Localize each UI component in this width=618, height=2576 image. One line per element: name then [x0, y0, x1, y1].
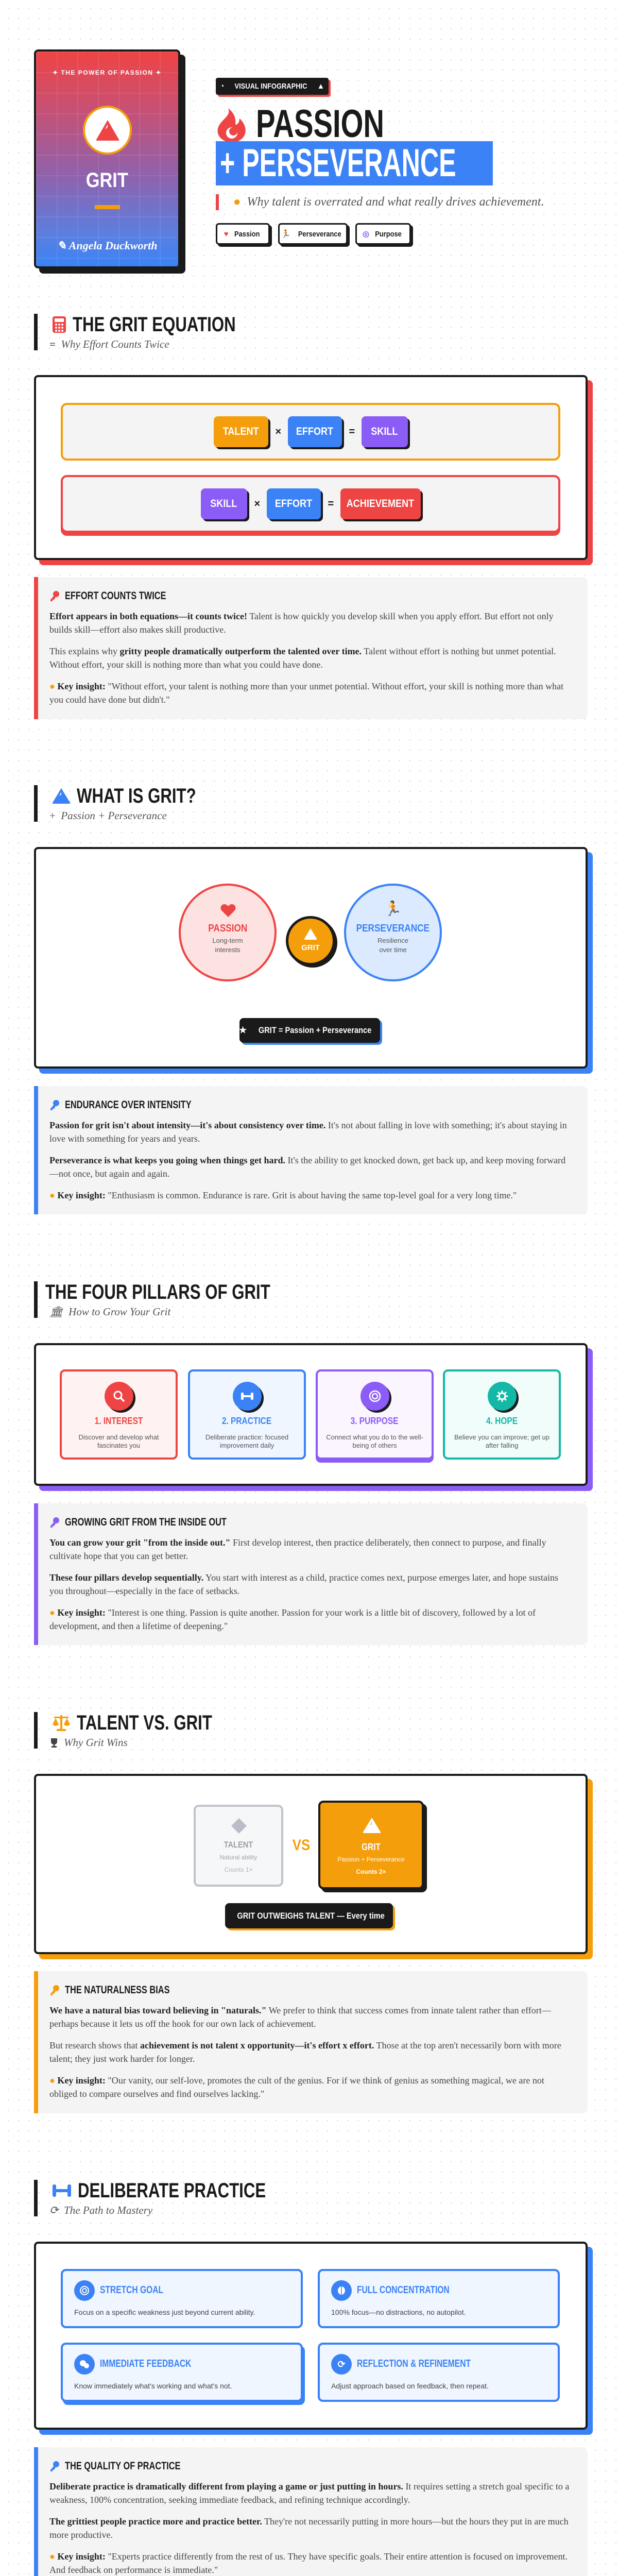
- text block: the naturalness bias: ● Key insight: "Our vanity, our self-love, promotes the cult of the genius. For if we think of genius as something magical, we are not obliged to compare ourselves and find ourselves lacking.": [49, 2075, 544, 2099]
- text block: the quality of practice: ● Key insight: "Experts practice differently from the rest of us. They have specific goals. Their entire attention is focused on improvement. And feedback on performance is immediate.": [49, 2551, 568, 2575]
- section header: talent vs grit: Why Grit Wins: [64, 1736, 128, 1749]
- text block: effort counts twice: Effort appears in both equations—it counts twice! Talent is how quickly you develop skill when you apply effort. But effort not only builds skill—effort also makes skill productive.: [49, 611, 554, 635]
- verdict pill: [225, 1903, 393, 1928]
- pillar: interest: Discover and develop what fascinates you: [78, 1433, 159, 1449]
- equation row: talent x effort = skill: TALENT: [223, 426, 259, 437]
- subtitle: ●: [233, 195, 241, 209]
- text block: endurance over intensity: Perseverance is what keeps you going when things get hard. It's the ability to get knocked down, get back up, and keep moving forward—not once, but again and again.: [49, 1155, 565, 1179]
- pillar: practice: Deliberate practice: focused improvement daily: [205, 1433, 288, 1449]
- pillar: practice: 2. PRACTICE: [222, 1416, 272, 1426]
- equation row: talent x effort = skill: =: [349, 426, 355, 437]
- formula pill: ★: [239, 1025, 247, 1035]
- circle: perseverance: Resilience: [377, 937, 408, 944]
- circle: perseverance: PERSEVERANCE: [356, 923, 430, 934]
- equation row: skill x effort = achievement: EFFORT: [275, 498, 312, 510]
- text block: endurance over intensity: Passion for grit isn't about intensity—it's about consistency over time. It's not about falling in love with something; it's about staying in love with something for years and years.: [49, 1120, 567, 1144]
- pillar: purpose: Connect what you do to the well-being of others: [326, 1433, 423, 1449]
- section header: four pillars: [34, 1281, 394, 1318]
- panel: four pillars: [34, 1343, 588, 1486]
- card: talent: Natural ability: [220, 1854, 257, 1861]
- practice card: full concentration: 100% focus—no distractions, no autopilot.: [331, 2308, 466, 2316]
- tag: purpose: Purpose: [375, 230, 402, 238]
- practice card: stretch goal: Focus on a specific weakness just beyond current ability.: [74, 2308, 255, 2316]
- equation row: skill x effort = achievement: [61, 475, 560, 533]
- section header: the grit equation: Why Effort Counts Twice: [61, 338, 169, 350]
- practice card: full concentration: FULL CONCENTRATION: [357, 2284, 450, 2296]
- text block: effort counts twice: ● Key insight: "Without effort, your talent is nothing more than your unmet potential. Without effort, your skill is nothing more than what you could have done but didn't.": [49, 681, 563, 705]
- text block: the naturalness bias: But research shows that achievement is not talent x opportunity—it's effort x effort. Those at the top aren't necessarily born with more talent; they just work harder for longer.: [49, 2040, 561, 2064]
- circle: perseverance: over time: [379, 946, 407, 954]
- text block: growing grit from the inside out: ● Key insight: "Interest is one thing. Passion is quite another. Passion for your work is a little bit of discovery, followed by a lot of development, and then a lifetime of deepening.": [49, 1607, 536, 1631]
- verdict pill: GRIT OUTWEIGHS TALENT — Every time: [237, 1910, 385, 1921]
- formula pill: GRIT = Passion + Perseverance: [259, 1025, 371, 1035]
- text block: growing grit from the inside out: [34, 1503, 588, 1645]
- text block: endurance over intensity: ENDURANCE OVER INTENSITY: [65, 1099, 192, 1111]
- text block: the quality of practice: [34, 2447, 588, 2576]
- section header: what is grit: WHAT IS GRIT?: [77, 784, 196, 807]
- text block: effort counts twice: This explains why gritty people dramatically outperform the talented over time. Talent without effort is nothing but unmet potential. Without effort, your skill is nothing more than what you could have done.: [49, 646, 556, 670]
- card: talent: TALENT: [224, 1840, 253, 1850]
- tag: perseverance: Perseverance: [298, 230, 341, 238]
- card: grit: [318, 1801, 424, 1889]
- pillar: interest: 1. INTEREST: [95, 1416, 143, 1426]
- pillar: purpose: [316, 1369, 434, 1460]
- text block: endurance over intensity: [34, 1086, 588, 1214]
- circle: passion: PASSION: [208, 923, 247, 934]
- pillar: practice: [188, 1369, 306, 1460]
- practice card: immediate feedback: IMMEDIATE FEEDBACK: [100, 2358, 191, 2369]
- cover author: ✎ Angela Duckworth: [57, 239, 157, 252]
- cover kicker: ✦ THE POWER OF PASSION ✦: [53, 69, 162, 76]
- section header: the grit equation: =: [49, 338, 56, 350]
- text block: the naturalness bias: THE NATURALNESS BIAS: [65, 1984, 170, 1996]
- section header: the grit equation: [34, 314, 394, 350]
- section header: what is grit: +: [49, 809, 56, 822]
- badge: visual infographic: ◔ ▲: [220, 82, 324, 91]
- text block: the quality of practice: Deliberate practice is dramatically different from playing a game or just putting in hours. It requires setting a stretch goal specific to a weakness, 100% concentration, seeking immediate feedback, and refining technique accordingly.: [49, 2481, 569, 2505]
- pillar: hope: 4. HOPE: [486, 1416, 518, 1426]
- panel: talent vs grit: [34, 1774, 588, 1954]
- text block: endurance over intensity: ● Key insight: "Enthusiasm is common. Endurance is rare. Grit is about having the same top-level goal for a very long time.": [49, 1190, 517, 1200]
- text block: the naturalness bias: We have a natural bias toward believing in "naturals." We prefer to think that success comes from innate talent rather than effort—perhaps because it lets us off the hook for our own lack of achievement.: [49, 2005, 551, 2029]
- section header: what is grit: Passion + Perseverance: [61, 809, 167, 822]
- section header: talent vs grit: TALENT VS. GRIT: [77, 1711, 212, 1734]
- hero title: [216, 102, 493, 185]
- title line: passion: PASSION: [256, 102, 384, 146]
- circle: grit: GRIT: [301, 943, 320, 952]
- section header: talent vs grit: [34, 1712, 394, 1749]
- circle: passion: [179, 884, 277, 981]
- practice card: reflection and refinement: Adjust approach based on feedback, then repeat.: [331, 2382, 489, 2390]
- formula pill: [239, 1018, 380, 1043]
- circle: perseverance: 🏃: [384, 901, 402, 917]
- book cover: [34, 49, 180, 268]
- section header: four pillars: THE FOUR PILLARS OF GRIT: [45, 1281, 270, 1303]
- badge: visual infographic: VISUAL INFOGRAPHIC: [234, 82, 307, 91]
- section header: deliberate practice: DELIBERATE PRACTICE: [78, 2179, 266, 2202]
- text block: the quality of practice: The grittiest people practice more and practice better. They're not necessarily putting in more hours—but the hours they put in are much more productive.: [49, 2516, 569, 2540]
- card: talent: [194, 1805, 283, 1887]
- text block: the naturalness bias: [34, 1971, 588, 2113]
- equation row: talent x effort = skill: EFFORT: [296, 426, 333, 437]
- vs label: VS: [293, 1837, 310, 1854]
- circle: passion: interests: [215, 946, 241, 954]
- panel: deliberate practice: [34, 2242, 588, 2430]
- tag: purpose: [355, 223, 411, 245]
- subtitle: [216, 194, 576, 210]
- practice card: immediate feedback: Know immediately what's working and what's not.: [74, 2382, 232, 2390]
- equation row: skill x effort = achievement: ×: [254, 498, 260, 509]
- subtitle: Why talent is overrated and what really drives achievement.: [247, 195, 544, 209]
- text block: effort counts twice: EFFORT COUNTS TWICE: [65, 590, 166, 602]
- practice card: reflection and refinement: ⟳: [337, 2359, 346, 2369]
- practice card: full concentration: [318, 2269, 560, 2328]
- section header: deliberate practice: [34, 2180, 394, 2216]
- tag: perseverance: 🏃: [281, 230, 291, 239]
- icon: flame: [217, 108, 246, 141]
- equation row: talent x effort = skill: SKILL: [371, 426, 398, 437]
- title line: perseverance: + PERSEVERANCE: [220, 141, 456, 185]
- tag: passion: Passion: [234, 230, 260, 238]
- equation row: skill x effort = achievement: SKILL: [210, 498, 237, 510]
- section header: deliberate practice: ⟳ The Path to Mastery: [49, 2204, 152, 2216]
- circle: passion: Long-term: [212, 937, 243, 944]
- text block: effort counts twice: [34, 577, 588, 719]
- tag: passion: ♥: [224, 230, 229, 238]
- section header: four pillars: 🏛 How to Grow Your Grit: [49, 1306, 170, 1318]
- pillar: interest: [60, 1369, 178, 1460]
- text block: growing grit from the inside out: These four pillars develop sequentially. You start with interest as a child, practice comes next, purpose emerges later, and hope sustains you throughout—especially in the face of setbacks.: [49, 1572, 558, 1596]
- circle: perseverance: [344, 884, 442, 981]
- practice card: immediate feedback: [61, 2343, 303, 2402]
- pillar: hope: [443, 1369, 561, 1460]
- panel: grit equation: [34, 375, 588, 560]
- text block: the quality of practice: THE QUALITY OF PRACTICE: [65, 2460, 180, 2472]
- circle: grit: [286, 916, 335, 965]
- practice card: reflection and refinement: [318, 2343, 560, 2402]
- cover title: GRIT: [86, 169, 128, 192]
- pillar: purpose: 3. PURPOSE: [351, 1416, 399, 1426]
- cover divider: [95, 205, 120, 209]
- card: grit: Passion + Perseverance: [337, 1856, 405, 1863]
- practice card: stretch goal: [61, 2269, 303, 2328]
- tag: perseverance: [278, 223, 348, 245]
- badge: visual infographic: [216, 78, 329, 95]
- pillar: hope: Believe you can improve; get up after falling: [454, 1433, 550, 1449]
- section header: what is grit: [34, 785, 394, 822]
- text block: growing grit from the inside out: You can grow your grit "from the inside out." First develop interest, then practice deliberately, then connect to purpose, and finally cultivate hope that you can get better.: [49, 1537, 546, 1561]
- practice card: reflection and refinement: REFLECTION & REFINEMENT: [357, 2358, 471, 2369]
- equation row: talent x effort = skill: [61, 403, 560, 461]
- section header: the grit equation: THE GRIT EQUATION: [73, 313, 236, 336]
- equation row: skill x effort = achievement: ACHIEVEMENT: [347, 498, 414, 510]
- card: talent: Counts 1×: [224, 1866, 253, 1873]
- text block: growing grit from the inside out: GROWING GRIT FROM THE INSIDE OUT: [65, 1516, 227, 1528]
- panel: what is grit diagram: [34, 847, 588, 1069]
- equation row: skill x effort = achievement: =: [328, 498, 334, 509]
- tag: passion: [216, 223, 270, 245]
- equation row: talent x effort = skill: ×: [275, 426, 281, 437]
- cover icon: mountain: [83, 106, 132, 155]
- practice card: stretch goal: STRETCH GOAL: [100, 2284, 163, 2296]
- card: grit: GRIT: [362, 1842, 381, 1852]
- tag: purpose: ◎: [363, 230, 369, 239]
- card: grit: Counts 2×: [356, 1868, 386, 1875]
